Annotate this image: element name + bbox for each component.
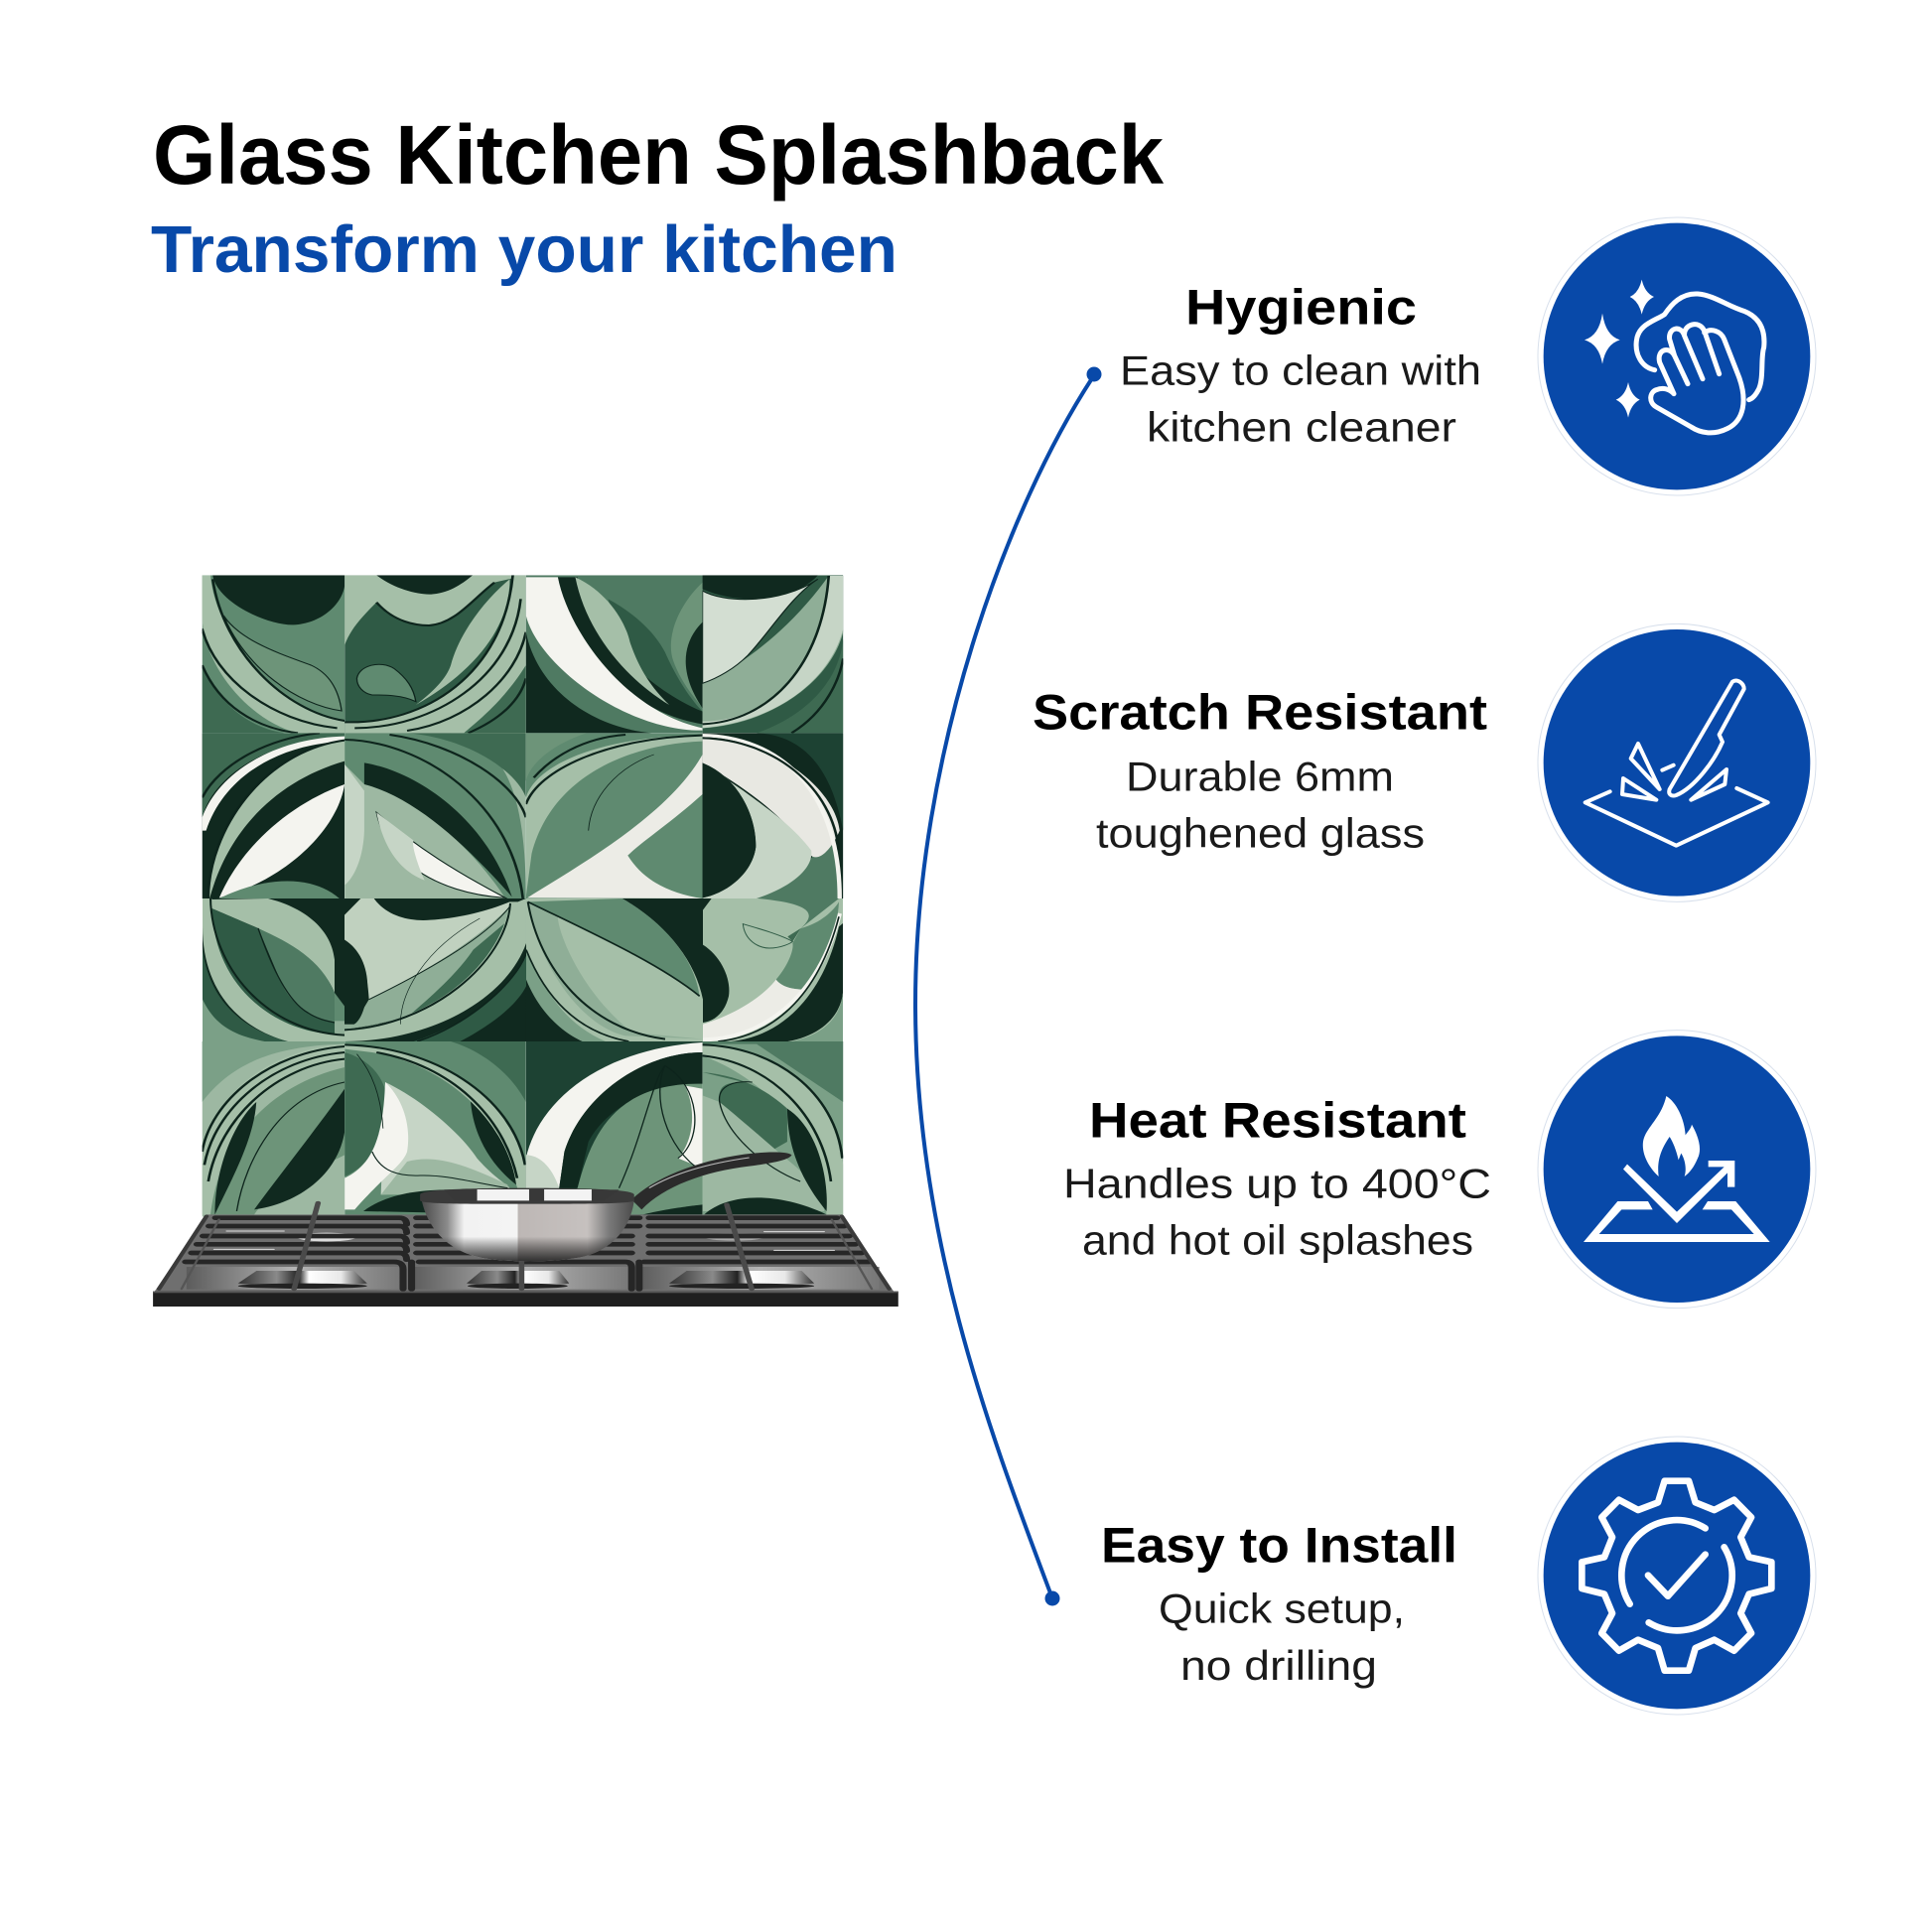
pan handle bbox=[631, 1153, 791, 1209]
connector curve with end dots bbox=[915, 367, 1102, 1606]
hob tray bbox=[154, 1214, 895, 1293]
product image: patterned glass splashback bbox=[203, 575, 843, 1217]
feature: Hygienic: Easy to clean with bbox=[1120, 347, 1481, 393]
feature: Scratch Resistant: toughened glass bbox=[1096, 810, 1425, 856]
icon: flame reflected from surface bbox=[1538, 1031, 1816, 1309]
feature: Scratch Resistant bbox=[1033, 685, 1487, 856]
feature: Easy to Install bbox=[1101, 1517, 1457, 1689]
feature: Heat Resistant: Handles up to 400°C bbox=[1063, 1160, 1491, 1207]
feature: Heat Resistant: and hot oil splashes bbox=[1082, 1217, 1473, 1263]
frying pan bbox=[420, 1153, 791, 1262]
grates bbox=[159, 1203, 890, 1289]
subtitle: Transform your kitchen bbox=[151, 212, 897, 287]
icon: hand wiping with sparkles bbox=[1538, 217, 1816, 495]
feature: Heat Resistant: Heat Resistant bbox=[1089, 1092, 1466, 1148]
title: Glass Kitchen Splashback bbox=[153, 108, 1164, 202]
burners bbox=[238, 1233, 814, 1289]
pan rim bbox=[420, 1188, 634, 1204]
feature: Easy to Install: Quick setup, bbox=[1159, 1585, 1405, 1632]
feature: Scratch Resistant: Durable 6mm bbox=[1126, 753, 1394, 800]
feature: Hygienic: kitchen cleaner bbox=[1147, 403, 1456, 451]
metal burner panels bbox=[187, 1267, 880, 1290]
icon: knife scratching glass bbox=[1538, 623, 1816, 901]
feature: Scratch Resistant: Scratch Resistant bbox=[1033, 685, 1487, 741]
feature: Heat Resistant bbox=[1063, 1092, 1491, 1263]
front edge bbox=[153, 1292, 898, 1307]
icon: gear with check mark bbox=[1538, 1437, 1816, 1715]
feature: Easy to Install: Easy to Install bbox=[1101, 1517, 1457, 1573]
pan body bbox=[422, 1199, 634, 1262]
feature: Hygienic: Hygienic bbox=[1185, 280, 1417, 336]
product image: gas hob with frying pan bbox=[153, 1153, 898, 1307]
feature: Hygienic bbox=[1120, 280, 1481, 451]
feature: Easy to Install: no drilling bbox=[1180, 1642, 1377, 1689]
